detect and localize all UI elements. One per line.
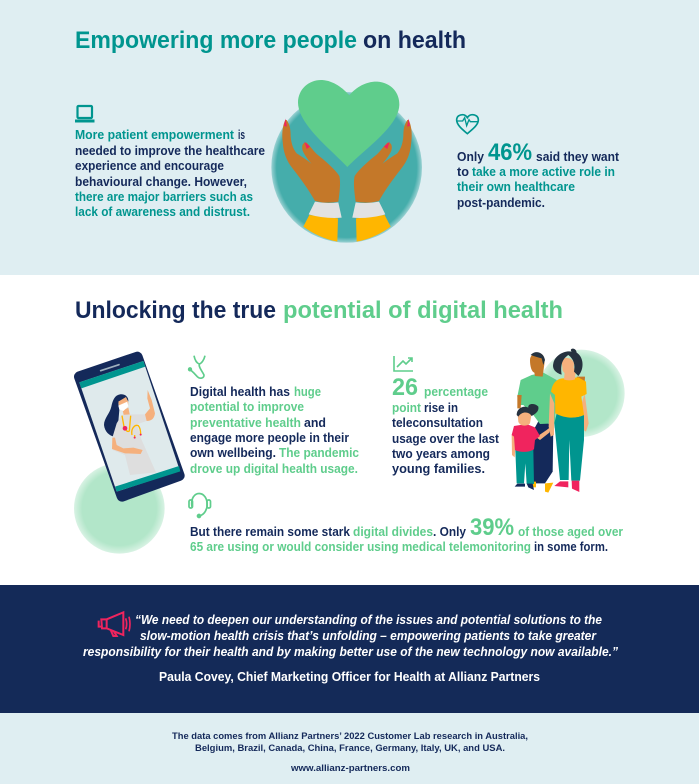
footer url: www.allianz-partners.com bbox=[290, 763, 410, 774]
text block: digital health potential: preventative health bbox=[190, 415, 301, 430]
title: empowering: on health bbox=[363, 27, 466, 54]
text block: patient empowerment: experience and encourage bbox=[75, 158, 224, 173]
text block: digital health potential bbox=[190, 384, 359, 476]
text block: 26 percentage point rise bbox=[392, 374, 500, 476]
quote: responsibility for their health and by making better use of the new technology now available.” bbox=[83, 644, 618, 659]
quote: “We need to deepen our understanding of the issues and potential solutions to the bbox=[135, 612, 602, 627]
text block: patient empowerment: there are major barriers such as bbox=[75, 189, 253, 204]
illustration: family bbox=[512, 349, 625, 493]
icon: stethoscope bbox=[189, 356, 205, 378]
title: digital health: potential of digital health bbox=[283, 297, 563, 324]
text block: 46 percent statistic bbox=[457, 139, 620, 210]
text block: digital health potential: and bbox=[304, 415, 326, 430]
text block: 26 percentage point rise: usage over the last bbox=[392, 431, 500, 446]
text block: patient empowerment: lack of awareness and distrust. bbox=[75, 204, 250, 219]
text block: patient empowerment: needed to improve the healthcare bbox=[75, 143, 265, 158]
text block: 26 percentage point rise: rise in bbox=[424, 400, 458, 415]
text block: 46 percent statistic: Only bbox=[457, 149, 485, 164]
text block: digital health potential: engage more people in their bbox=[190, 430, 349, 445]
quote: slow-motion health crisis that’s unfolding – empowering patients to take greater bbox=[140, 628, 597, 643]
icon: heart with pulse bbox=[457, 115, 478, 134]
text block: digital health potential: potential to improve bbox=[190, 399, 304, 414]
text block: 26 percentage point rise: percentage bbox=[424, 384, 488, 399]
text block: digital divides: But there remain some stark bbox=[190, 524, 351, 539]
text block: digital divides: 39% bbox=[470, 514, 514, 541]
text block: digital health potential: huge bbox=[294, 384, 321, 399]
text block: 26 percentage point rise: teleconsultation bbox=[392, 415, 483, 430]
text block: digital divides: 65 are using or would consider using medical telemonitoring bbox=[190, 539, 531, 554]
quote attribution: Paula Covey, Chief Marketing Officer for Health at Allianz Partners bbox=[159, 669, 540, 684]
text block: 26 percentage point rise: two years among bbox=[392, 446, 490, 461]
title: digital health bbox=[75, 297, 563, 324]
icon: rising chart bbox=[394, 356, 413, 371]
text block: digital health potential: own wellbeing. bbox=[190, 445, 276, 460]
text block: 46 percent statistic: their own healthcare bbox=[457, 179, 575, 194]
text block: patient empowerment: behavioural change. However, bbox=[75, 174, 247, 189]
text block: 46 percent statistic: post-pandemic. bbox=[457, 195, 545, 210]
text block: 26 percentage point rise: 26 bbox=[392, 374, 418, 401]
panel: quote background bbox=[0, 585, 699, 713]
illustration: hands holding heart bbox=[271, 80, 422, 243]
text block: patient empowerment: is bbox=[238, 127, 245, 142]
text block: digital health potential: The pandemic bbox=[279, 445, 359, 460]
text block: patient empowerment: More patient empowerment bbox=[75, 127, 235, 142]
text block: 46 percent statistic: said they want bbox=[536, 149, 620, 164]
text block: 26 percentage point rise: young families. bbox=[392, 461, 485, 476]
panel: empowering background bbox=[0, 0, 699, 275]
text block: digital divides: of those aged over bbox=[518, 524, 623, 539]
text block: patient empowerment bbox=[75, 127, 265, 219]
text block: 46 percent statistic: to bbox=[457, 164, 469, 179]
illustration: phone with doctor bbox=[74, 357, 180, 554]
panel: digital health background bbox=[0, 275, 699, 585]
text block: digital divides: in some form. bbox=[534, 539, 608, 554]
text block: digital divides bbox=[190, 514, 623, 554]
panel: footer background bbox=[0, 713, 699, 784]
footer note bbox=[172, 731, 528, 754]
quote bbox=[83, 612, 618, 659]
footer note: Belgium, Brazil, Canada, China, France, Germany, Italy, UK, and USA. bbox=[195, 743, 505, 754]
text block: digital health potential: Digital health has bbox=[190, 384, 290, 399]
text block: 46 percent statistic: 46% bbox=[488, 139, 532, 166]
icon: megaphone bbox=[99, 612, 130, 636]
title: empowering: Empowering more people bbox=[75, 27, 357, 54]
title: digital health: Unlocking the true bbox=[75, 297, 276, 324]
text block: digital divides: . Only bbox=[433, 524, 467, 539]
icon: laptop bbox=[75, 106, 94, 121]
text block: digital divides: digital divides bbox=[353, 524, 433, 539]
icon: headset bbox=[189, 494, 210, 518]
footer note: The data comes from Allianz Partners’ 2022 Customer Lab research in Australia, bbox=[172, 731, 528, 742]
text block: 26 percentage point rise: point bbox=[392, 400, 422, 415]
text block: digital health potential: drove up digital health usage. bbox=[190, 461, 358, 476]
text block: 46 percent statistic: take a more active role in bbox=[472, 164, 615, 179]
